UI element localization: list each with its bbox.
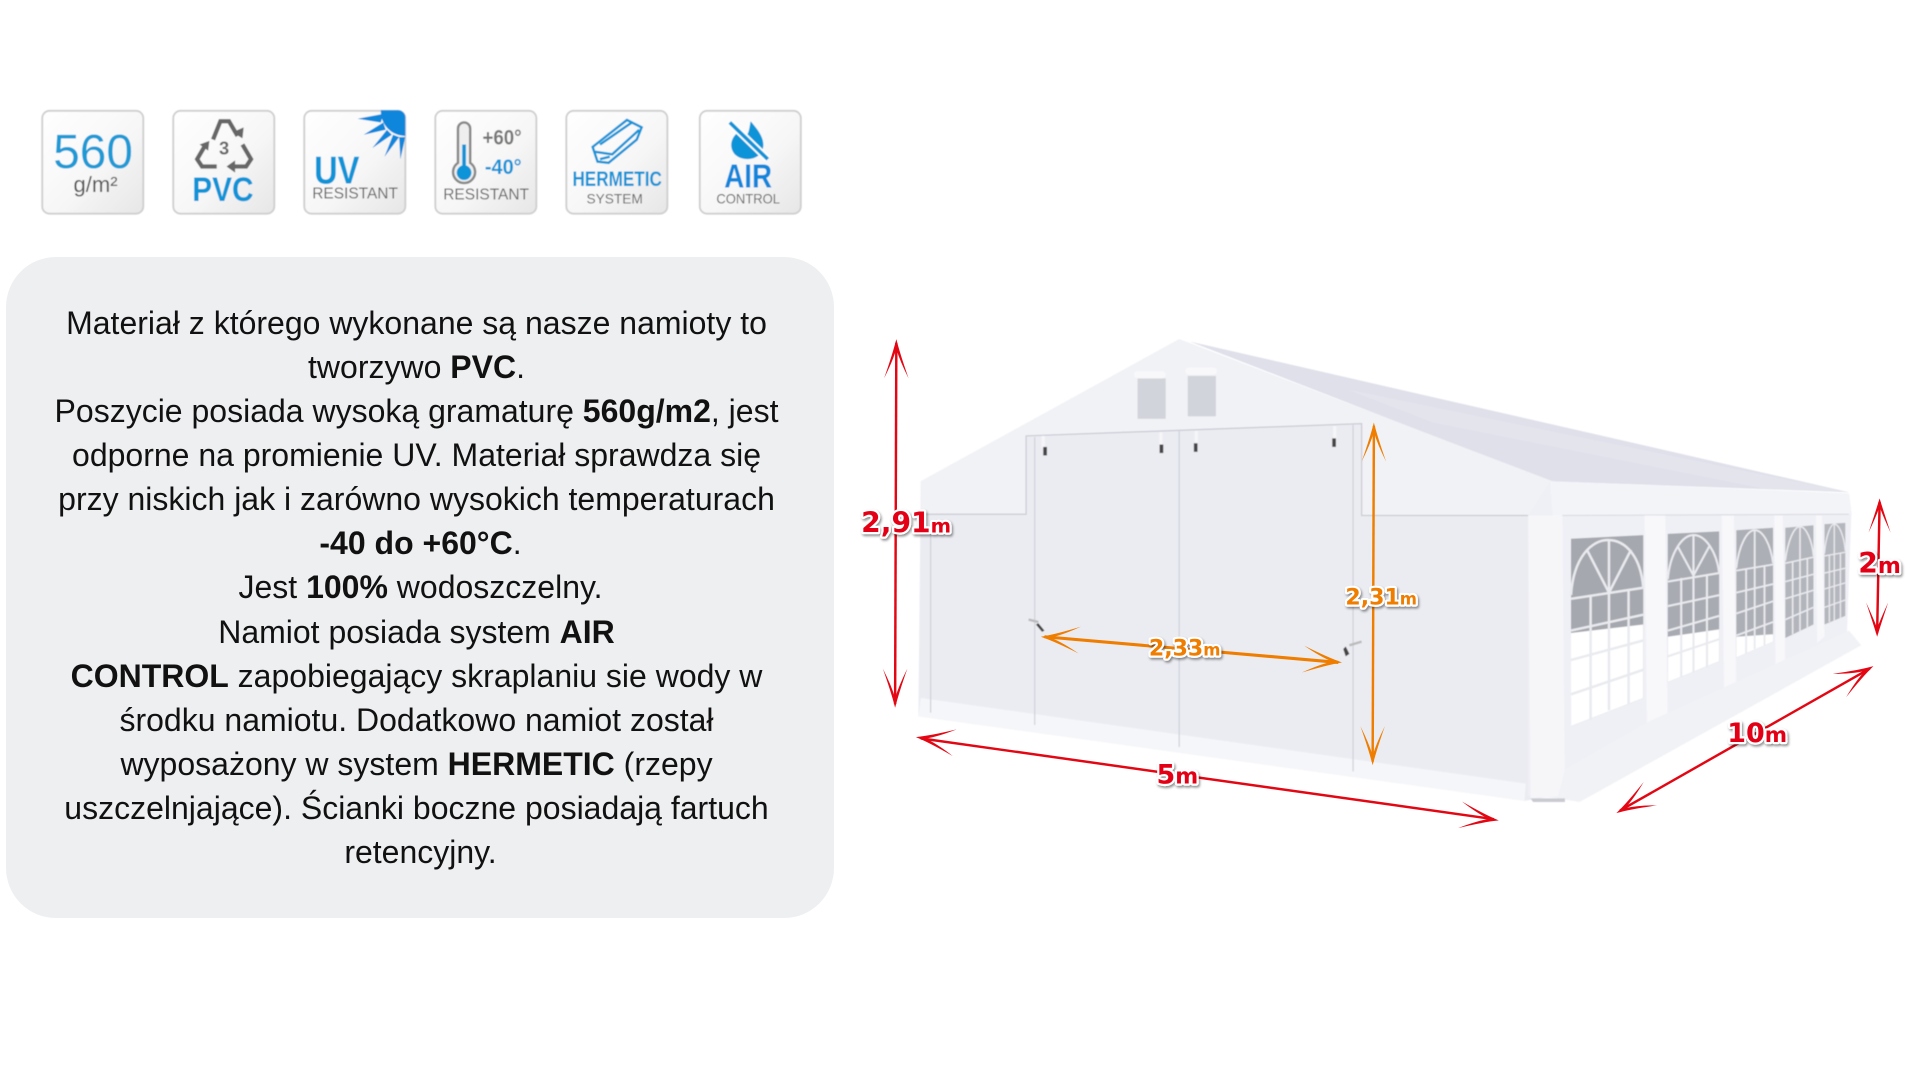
text block: material description: Namiot posiada system AIR [218,614,615,650]
arrow: door width 2,33 m [1040,623,1343,676]
tent side wall [1528,481,1861,802]
text block: material description: środku namiotu. Dodatkowo namiot został [119,702,714,738]
text block: material description: -40 do +60°C. [319,525,522,561]
arrow: width 5 m [914,724,1501,834]
icon: recycling 3 PVC [173,111,274,214]
icon: temperature resistant: +60° [482,126,522,149]
icon: hermetic system: SYSTEM [587,190,643,206]
text block: material description: CONTROL zapobiegający skraplaniu sie wody w [71,658,762,694]
icon: UV resistant: UV [314,150,359,193]
icon: air control: CONTROL [716,190,780,206]
text block: material description: uszczelnjające). Ścianki boczne posiadają fartuch [64,790,769,826]
text block: material description [55,305,778,870]
tent window 5 [1824,523,1845,624]
arrow: door height 2,31 m [1360,422,1386,765]
icon: 560 g/m2: g/m² [73,172,118,197]
icon: 560 g/m2 [42,111,143,214]
tent window 4 [1785,525,1813,638]
label: 2,31 m: 2,31m [1345,585,1417,610]
icon: UV resistant [303,109,407,215]
arrow: side height 2 m [1866,498,1891,637]
tent window 1 [1571,535,1643,726]
tent window 2 [1668,531,1719,682]
tent gable vents [1134,367,1217,419]
icon: hermetic system [566,111,667,214]
illustration: white PVC tent [918,339,1861,802]
icon: recycling 3 PVC: 3 [219,137,229,158]
icon: recycling 3 PVC: PVC [192,171,253,209]
label: 2,33 m: 2,33m [1149,637,1220,662]
text block: material description: tworzywo PVC. [308,349,525,385]
icon: temperature resistant: -40° [485,156,522,179]
text block: material description: Materiał z którego wykonane są nasze namioty to [66,305,767,341]
text block: material description: wyposażony w system HERMETIC (rzepy [120,746,713,782]
text block: material description: Jest 100% wodoszczelny. [238,569,603,605]
text block: material description: retencyjny. [344,834,497,870]
panel: material description [6,257,834,918]
label: 10 m: 10m [1727,718,1787,749]
tent door hooks [1029,426,1362,656]
arrow: height 2,91 m [883,339,909,708]
icon: hermetic system: HERMETIC [572,168,662,191]
tent roof [1190,342,1849,492]
icon row: material features [41,109,802,215]
icon: temperature resistant [435,111,536,214]
label: 2,91 m: 2,91m [861,507,951,540]
text block: material description: Poszycie posiada wysoką gramaturę 560g/m2, jest [55,393,778,429]
icon: 560 g/m2: 560 [53,126,133,179]
icon: temperature resistant: RESISTANT [443,187,529,204]
label: 2 m: 2m [1858,547,1901,580]
tent front wall [918,339,1555,801]
icon: air control [700,111,801,214]
arrow: length 10 m [1610,654,1880,825]
text block: material description: przy niskich jak i zarówno wysokich temperaturach [58,481,775,517]
icon: UV resistant: RESISTANT [312,185,398,202]
label: 5 m: 5m [1156,760,1198,791]
tent window 3 [1736,528,1773,658]
icon: air control: AIR [724,158,772,195]
text block: material description: odporne na promienie UV. Materiał sprawdza się [72,437,761,473]
